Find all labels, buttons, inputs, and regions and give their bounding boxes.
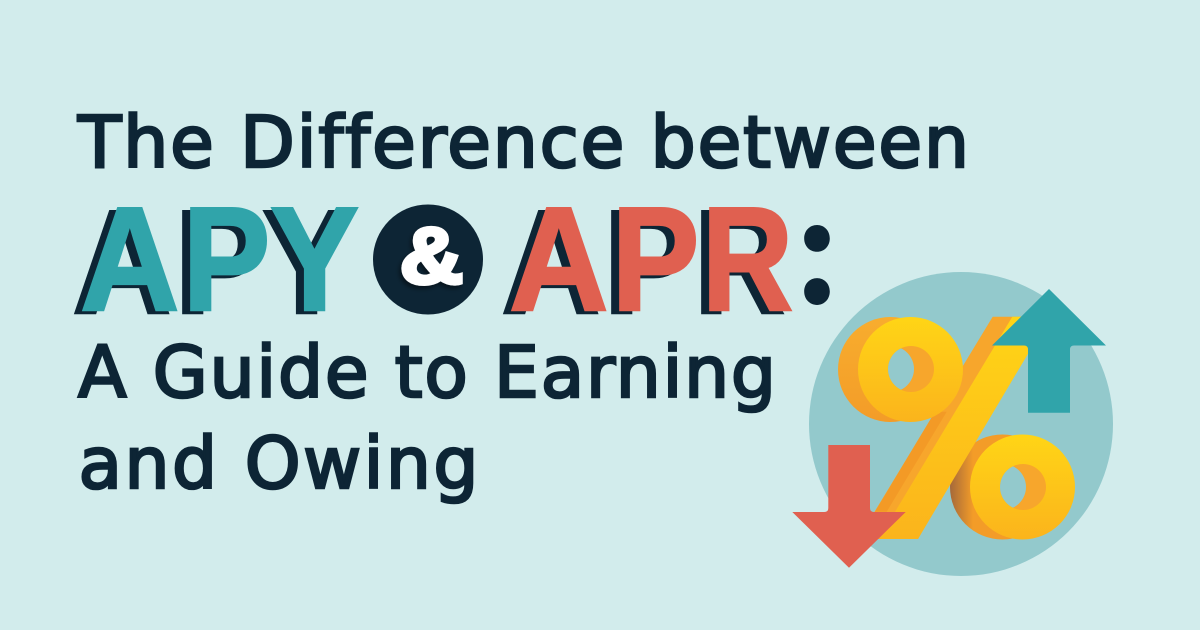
- APR heading: P: [611, 176, 699, 342]
- APY heading: A: [72, 181, 172, 345]
- APR heading: [501, 176, 793, 345]
- backdrop circle: [809, 272, 1113, 576]
- lower percent ring: [950, 434, 1075, 540]
- APR heading: R: [702, 177, 793, 342]
- title line 3: A Guide to Earning: [78, 331, 776, 414]
- APR heading: R: [694, 180, 785, 345]
- colon: :: [794, 142, 840, 344]
- ampersand badge: &: [400, 211, 463, 300]
- ampersand badge: [373, 204, 483, 314]
- icon: down arrow: [792, 445, 906, 568]
- APY heading: P: [182, 176, 270, 342]
- APY heading: Y: [262, 179, 351, 345]
- percent illustration: [792, 272, 1113, 576]
- title line 4: and Owing: [78, 422, 478, 505]
- APR heading: A: [501, 181, 601, 345]
- percent slash: [858, 317, 1050, 539]
- APR heading: A: [509, 178, 609, 342]
- title line 1: The Difference between: [77, 101, 969, 184]
- upper percent ring: [838, 317, 963, 422]
- APY heading: A: [80, 178, 180, 342]
- APY heading: P: [174, 179, 262, 345]
- APY heading: [72, 176, 359, 345]
- icon: up arrow: [992, 289, 1106, 413]
- APR heading: P: [603, 179, 691, 345]
- APY heading: Y: [270, 176, 359, 342]
